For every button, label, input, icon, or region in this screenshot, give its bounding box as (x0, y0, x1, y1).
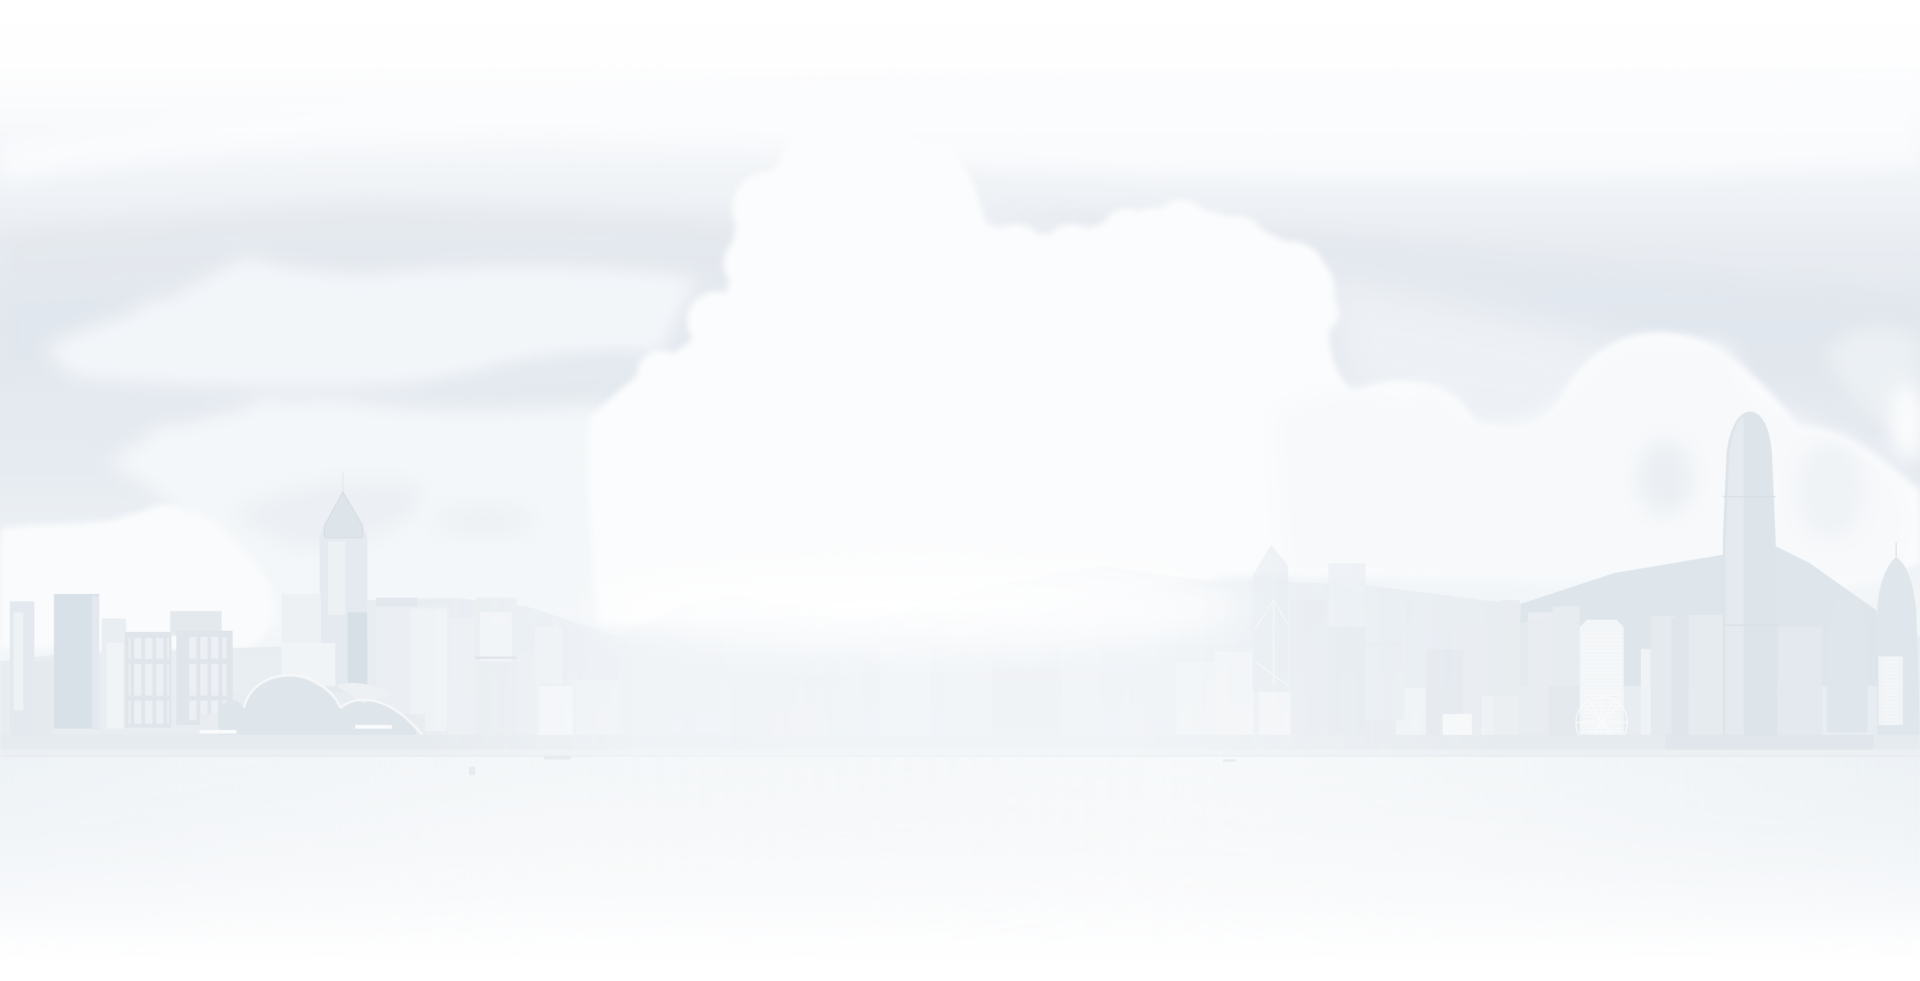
background illustration: Hong Kong skyline under clouds (0, 133, 1920, 902)
office towers left (102, 611, 233, 728)
left tower (10, 602, 34, 660)
Observation wheel (1576, 708, 1628, 735)
left cloud shadow (233, 480, 422, 549)
left cloud shadow right (435, 503, 533, 538)
harbour water (0, 756, 1920, 869)
waterfront podium (0, 735, 1920, 756)
office blocks right of plaza (376, 598, 516, 658)
distant mid-rise towers (1443, 600, 1579, 735)
left upper cloud (43, 257, 698, 388)
central haze over skyline (588, 563, 1249, 649)
central cumulus cloud (588, 131, 1920, 625)
skyline (0, 412, 1920, 756)
right cloud shadows (1638, 327, 1920, 539)
high cloud bands (0, 74, 1920, 404)
Bank of China tower (1254, 546, 1365, 580)
dark glass tower (54, 594, 99, 729)
left lower cloud (104, 397, 612, 637)
small boats (469, 756, 1236, 775)
right cumulus cloud (1273, 340, 1910, 588)
hills (0, 589, 1920, 735)
Convention Centre (200, 675, 423, 734)
Central Plaza tower (282, 472, 367, 692)
right side towers (1579, 542, 1917, 735)
left shadowed cloud (404, 357, 643, 419)
soft haze right of central cloud (1322, 282, 1629, 429)
bottom left cloud (0, 505, 275, 649)
Two IFC tower (1723, 412, 1778, 740)
